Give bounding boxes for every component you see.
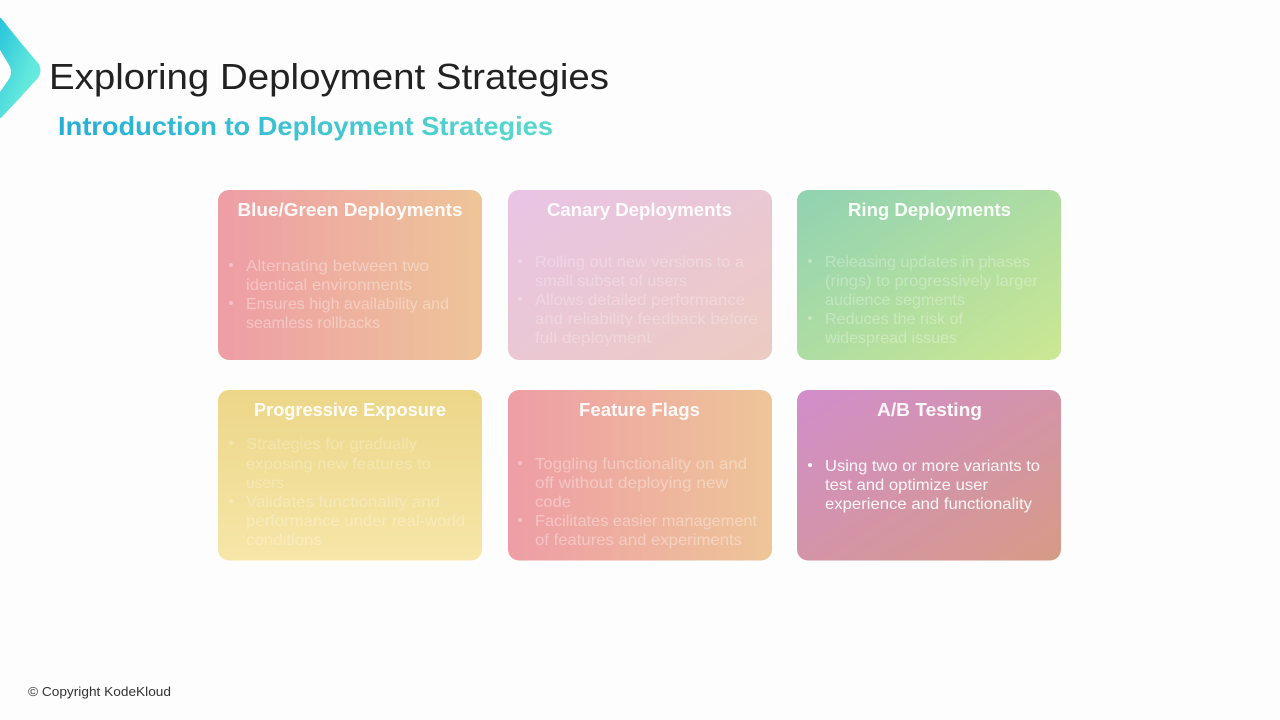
text block: Feature Flags bullets: Toggling functionality on and xyxy=(535,456,747,473)
text block: Blue/Green bullets xyxy=(229,258,449,332)
text block: Progressive Exposure bullets: Strategies for gradually xyxy=(246,436,417,453)
text block: Ring bullets: audience segments xyxy=(825,292,965,309)
heading: Blue/Green Deployments: Blue/Green Deployments xyxy=(238,200,462,220)
text block: Progressive Exposure bullets: performance under real-world xyxy=(246,513,465,530)
panel: Feature Flags xyxy=(508,390,772,560)
panel: Progressive Exposure xyxy=(218,390,482,560)
copyright footer: © Copyright KodeKloud xyxy=(28,684,171,699)
text block: Canary bullets: Allows detailed performance xyxy=(535,292,745,309)
text block: Canary bullets: small subset of users xyxy=(535,273,687,290)
heading: Ring Deployments: Ring Deployments xyxy=(848,200,1011,220)
text block: Canary bullets xyxy=(518,254,758,347)
text block: Ring bullets: widespread issues xyxy=(824,330,957,347)
text block: Blue/Green bullets: seamless rollbacks xyxy=(246,315,380,332)
panel: Ring Deployments xyxy=(797,190,1061,360)
subtitle: Introduction to Deployment Strategies xyxy=(58,111,553,141)
text block: Canary bullets: Rolling out new versions to a xyxy=(535,254,744,271)
heading: Feature Flags: Feature Flags xyxy=(579,400,700,420)
text block: Blue/Green bullets: Alternating between two xyxy=(246,258,429,275)
heading: Progressive Exposure: Progressive Exposure xyxy=(254,400,446,420)
panel: Canary Deployments xyxy=(508,190,772,360)
text block: Feature Flags bullets xyxy=(518,456,758,549)
panel: A/B Testing xyxy=(797,390,1061,560)
text block: Canary bullets: and reliability feedback before xyxy=(535,311,758,328)
heading: A/B Testing: A/B Testing xyxy=(877,400,982,420)
text block: Feature Flags bullets: off without deploying new xyxy=(535,475,728,492)
text block: Feature Flags bullets: of features and experiments xyxy=(535,532,742,549)
text block: Blue/Green bullets: Ensures high availability and xyxy=(246,296,449,313)
text block: Ring bullets xyxy=(808,254,1039,347)
text block: A/B Testing bullets: test and optimize user xyxy=(825,477,989,494)
text block: Feature Flags bullets: Facilitates easier management xyxy=(535,513,758,530)
text block: Progressive Exposure bullets: conditions xyxy=(246,532,322,549)
title: Exploring Deployment Strategies xyxy=(49,56,609,97)
text block: Progressive Exposure bullets: users xyxy=(246,475,284,492)
icon: chevron logo xyxy=(0,18,40,118)
text block: Ring bullets: (rings) to progressively larger xyxy=(825,273,1039,290)
text block: Canary bullets: full deployment xyxy=(535,330,652,347)
text block: Progressive Exposure bullets: exposing new features to xyxy=(246,456,431,473)
text block: Progressive Exposure bullets: Validates functionality and xyxy=(246,494,440,511)
text block: A/B Testing bullets: experience and functionality xyxy=(825,496,1032,513)
text block: A/B Testing bullets: Using two or more variants to xyxy=(825,458,1040,475)
text block: Progressive Exposure bullets xyxy=(229,436,465,549)
text block: Ring bullets: Reduces the risk of xyxy=(825,311,964,328)
text block: Ring bullets: Releasing updates in phases xyxy=(825,254,1030,271)
panel: Blue/Green Deployments xyxy=(218,190,482,360)
text block: A/B Testing bullets xyxy=(808,458,1040,513)
text block: Blue/Green bullets: identical environments xyxy=(246,277,412,294)
text block: Feature Flags bullets: code xyxy=(535,494,571,511)
heading: Canary Deployments: Canary Deployments xyxy=(547,200,732,220)
